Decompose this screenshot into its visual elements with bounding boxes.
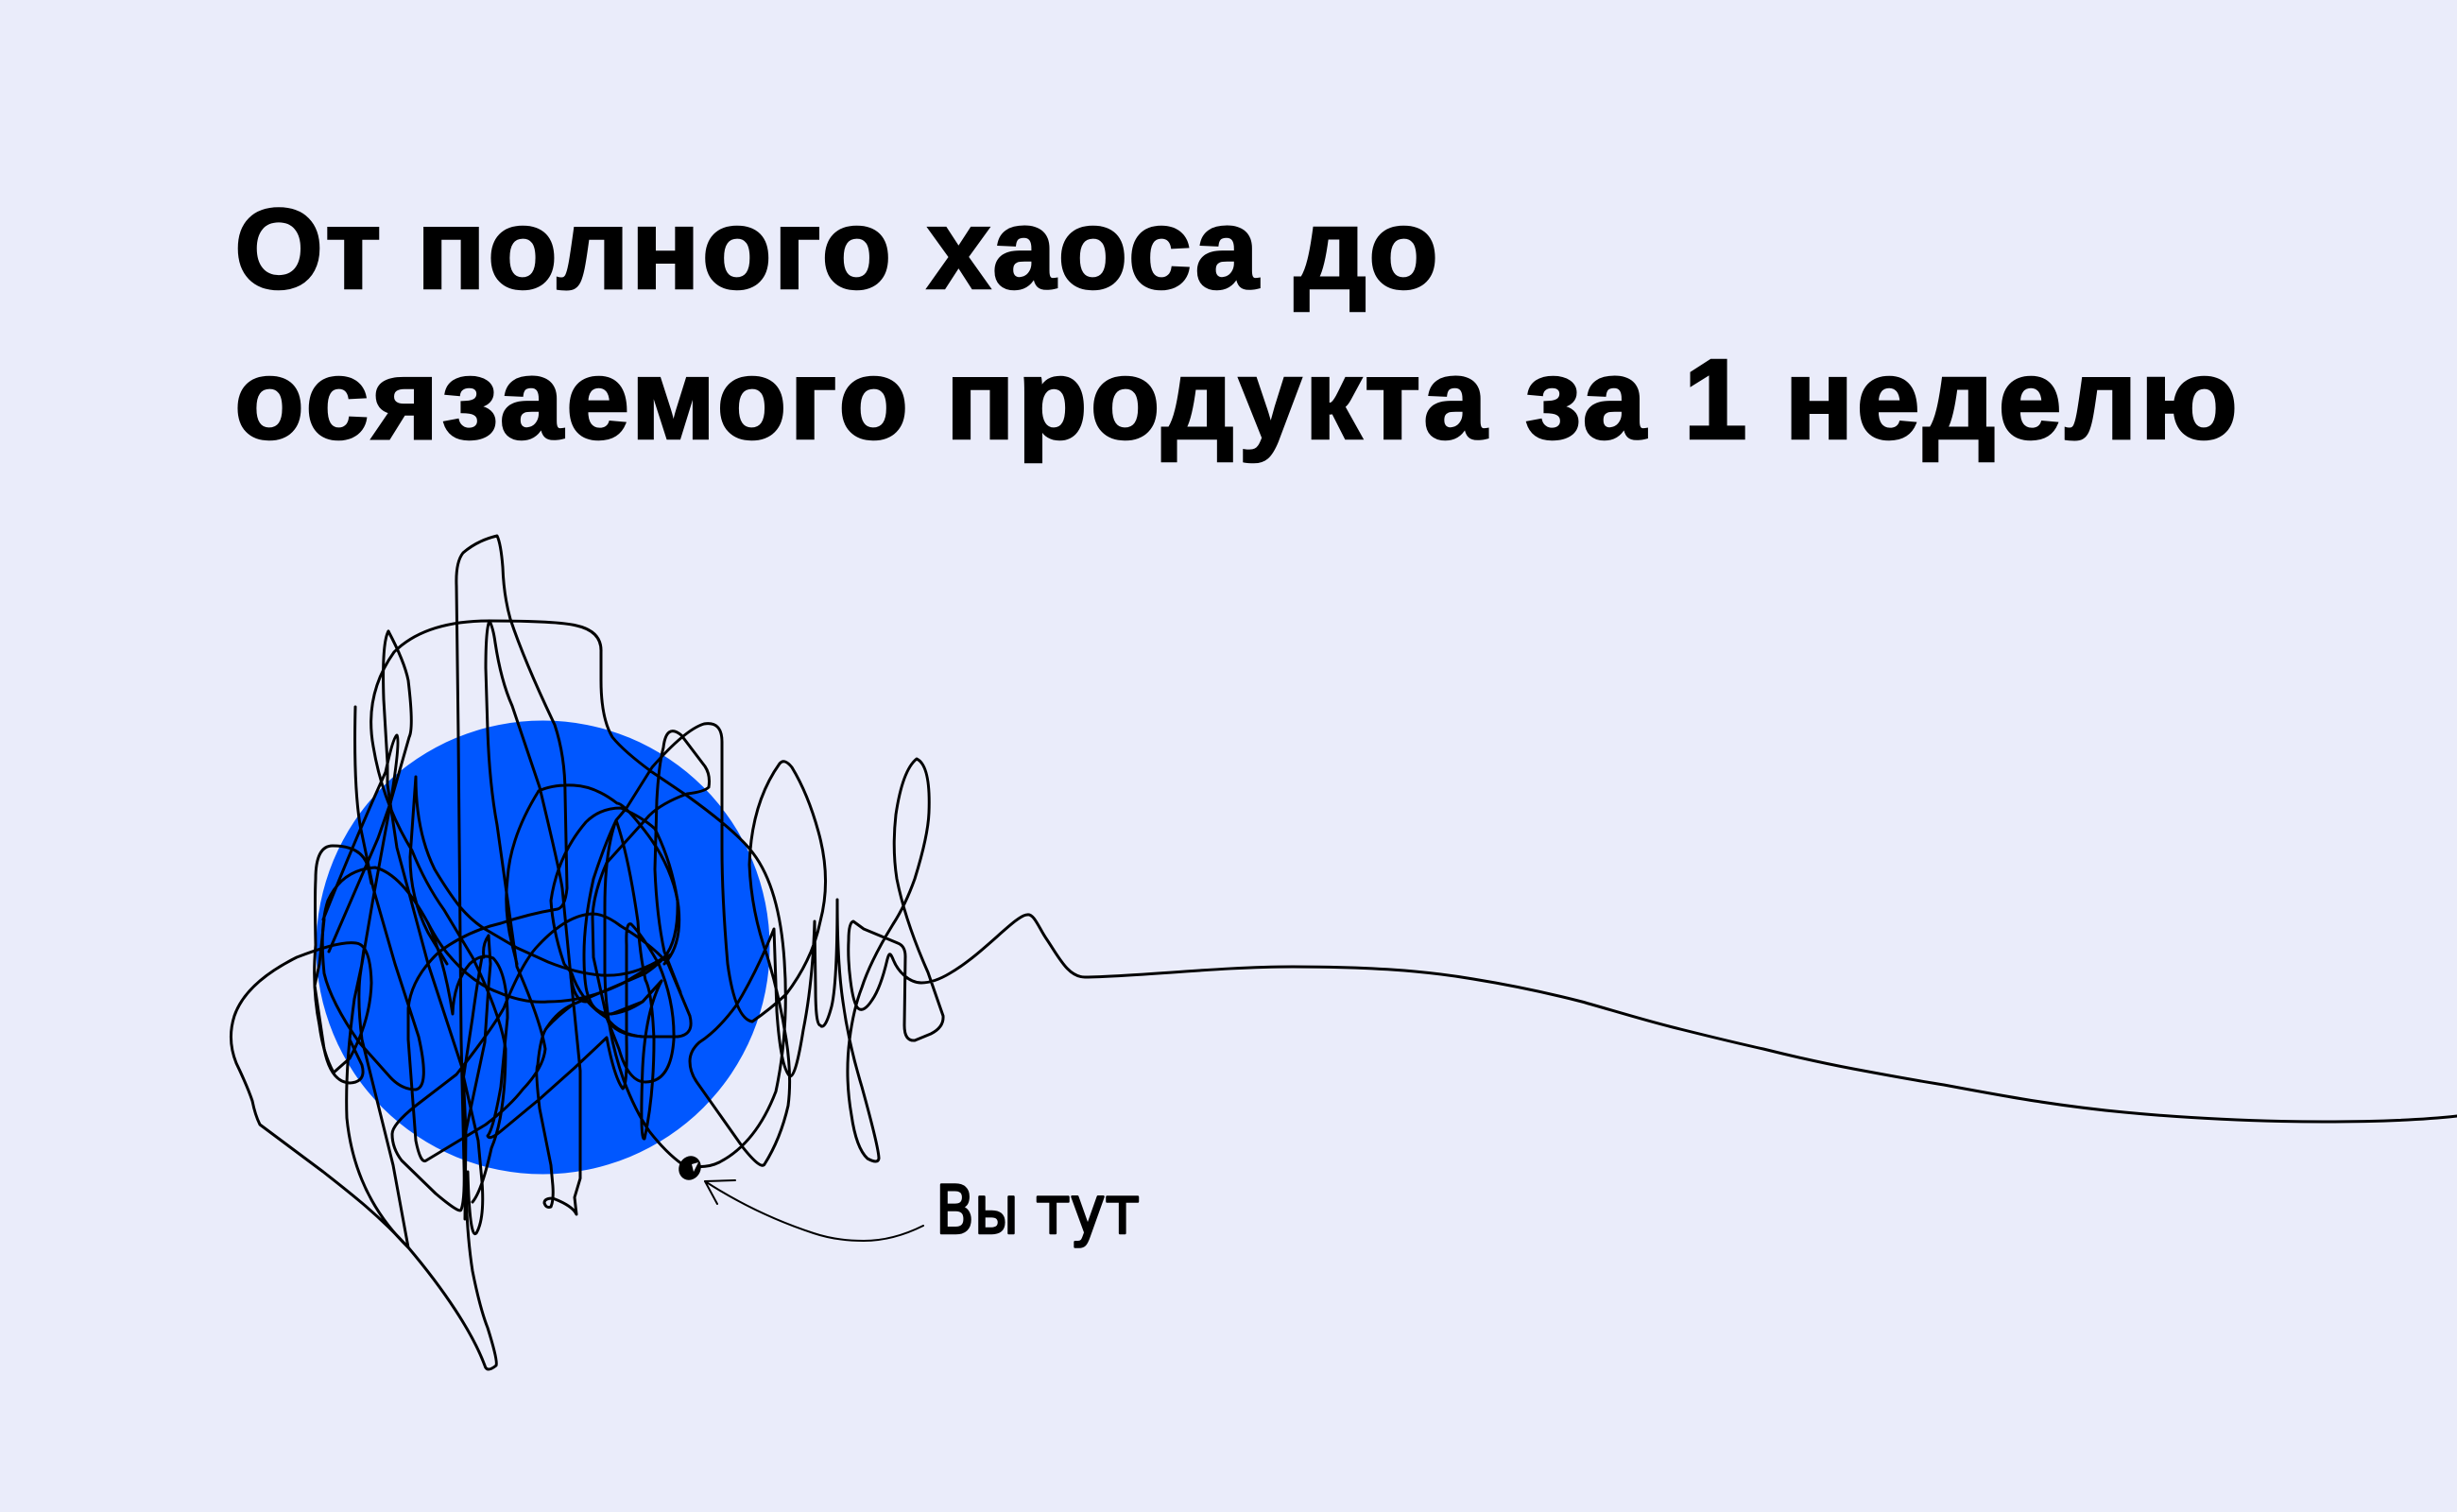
arrow to dot: [705, 1180, 923, 1241]
lower loop: [462, 1071, 483, 1234]
left tangle loop: [231, 846, 496, 1369]
label: you are here: Вы: [936, 1172, 1019, 1249]
main line: [371, 621, 2457, 1202]
label: you are here: [936, 1172, 1140, 1249]
tangle strands: [322, 536, 691, 1214]
scribble line from chaos to straight path: [231, 536, 2457, 1369]
title: [234, 184, 2238, 463]
you-are-here dot: [675, 1152, 705, 1184]
title: осязаемого продукта за 1 неделю: [234, 335, 2238, 463]
label: you are here: тут: [1036, 1172, 1140, 1249]
blue circle: [316, 720, 769, 1174]
title: От полного хаоса до: [234, 184, 1438, 313]
